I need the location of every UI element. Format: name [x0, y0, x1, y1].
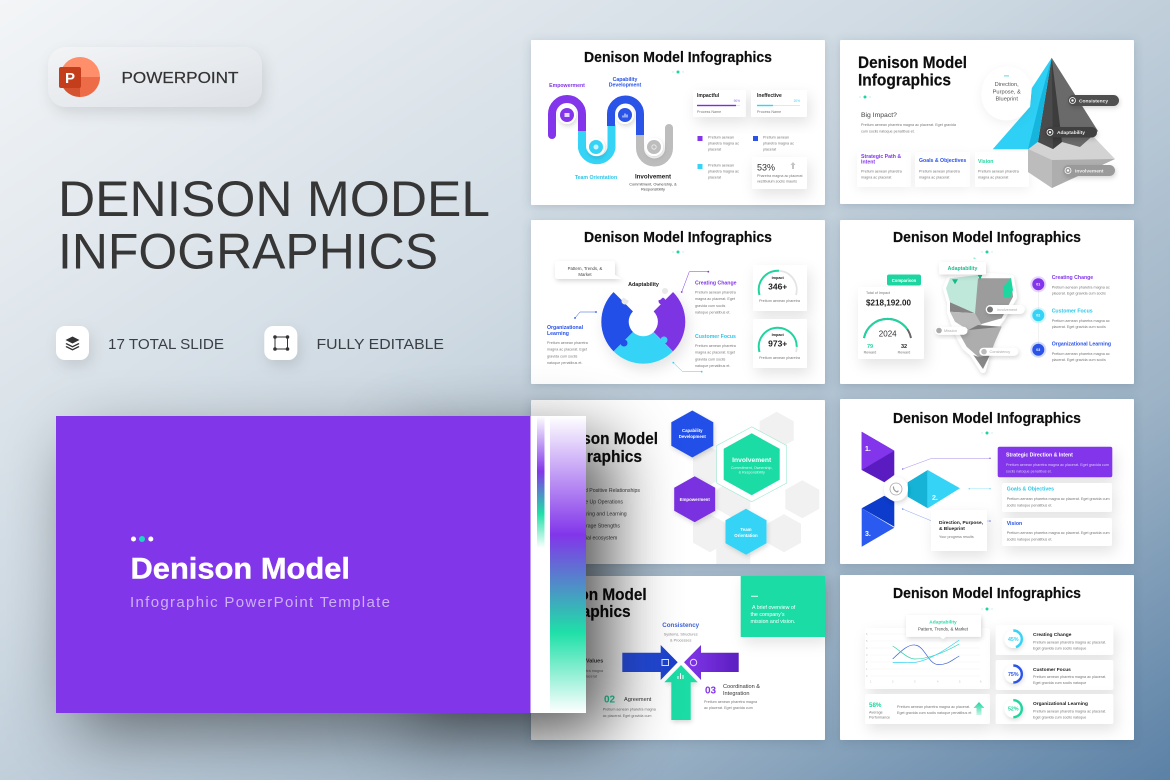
list: 01 [1036, 283, 1040, 287]
slide title: Denison Model Infographics [584, 50, 772, 66]
card: 53%: Pharetra magna ac placerat [757, 174, 803, 178]
card: 58%: Pretium aenean pharetra magna ac placerat. [897, 705, 970, 709]
card: customer focus: Pretium aenean pharetra magna ac placerat. [1033, 675, 1106, 679]
hexagon: involvement: Involvement [732, 457, 772, 464]
labels: Responsibility [641, 187, 665, 192]
card: ineffective [751, 90, 807, 117]
text block: Pretium aenean pharetra magna ac placerat. Eget gravida [861, 123, 957, 127]
gauge card: 973+: Pretium aenean pharetra [759, 356, 801, 360]
hexagon: involvement [717, 427, 787, 502]
line chart: 1 [866, 667, 868, 671]
text: creating change: gravida cum sociis [695, 304, 725, 308]
heading: consistency: & Processes [670, 638, 691, 642]
gauge card: 973+ [753, 319, 807, 368]
list: placerat. Eget gravida cum sociis [1052, 358, 1106, 362]
slide title [858, 54, 967, 90]
line chart: 5 [866, 639, 868, 643]
map label: consistency: Consistency [990, 350, 1010, 354]
arrow: purple [684, 645, 739, 680]
card: direction [931, 510, 987, 551]
text: customer focus: magna ac placerat. Eget [695, 351, 735, 355]
callout: mission and vision. [750, 619, 795, 625]
slide title: Infographics [549, 448, 642, 466]
slide 2: pyramid [840, 40, 1134, 204]
slide title: Infographics [538, 603, 631, 621]
slide title: Denison Model Infographics [893, 411, 1081, 427]
text: customer focus [695, 334, 737, 368]
slide title: Denison Model Infographics [893, 586, 1081, 602]
three cards [857, 152, 1029, 187]
legend items: placerat [708, 148, 721, 152]
hexagon: involvement: Commitment, Ownership, [731, 466, 773, 470]
card: 58% [865, 694, 990, 724]
list: 02 [1036, 314, 1040, 318]
panel shadow [75, 445, 405, 730]
card: comparison: Reward [898, 350, 910, 354]
hexagon: empowerment [674, 476, 715, 522]
card: ineffective: Process Name [757, 110, 781, 114]
card: goals: sociis natoque penatibus et. [1007, 504, 1052, 508]
text: organizational learning: Organizational [547, 325, 584, 331]
labels: Involvement [635, 174, 671, 180]
list: Leverage Strengths [575, 524, 620, 530]
map label: involvement [986, 305, 1025, 314]
line chart: 3 [914, 680, 916, 684]
label: consistency: Consistency [1079, 98, 1108, 104]
card: creating change: Eget gravida cum sociis natoque [1033, 646, 1086, 650]
item 02: Agreement [624, 697, 652, 703]
list: 03 [1036, 348, 1040, 352]
text block: cum sociis natoque penatibus et. [861, 130, 915, 134]
slide 4: polygon map [840, 220, 1134, 384]
three cards: Pretium aenean pharetra [919, 170, 961, 174]
main heading: INFOGRAPHICS [58, 224, 438, 280]
hexagon: team orientation [726, 509, 766, 555]
item 03: Pretium aenean pharetra magna [704, 700, 758, 704]
slide title [538, 586, 647, 621]
labels: Empowerment [549, 83, 585, 89]
pyramid [993, 58, 1115, 188]
card: creating change [996, 625, 1113, 655]
line chart: 4 [866, 646, 868, 650]
text: customer focus: natoque penatibus et. [695, 364, 730, 368]
shape 2: 2. [932, 495, 938, 502]
card: goals: Goals & Objectives [1007, 487, 1054, 493]
pagination dots [672, 250, 684, 254]
gradient strip [530, 416, 586, 713]
text: organizational learning: gravida cum sociis [547, 354, 577, 358]
gauge card: 346+ [753, 265, 807, 311]
legend items: pharetra magna ac [708, 142, 739, 146]
item 02 [603, 694, 657, 718]
pagination dots [859, 96, 871, 98]
panel: purple cover [56, 416, 530, 713]
card: impactful: Process Name [697, 110, 721, 114]
card: vision: Vision [1007, 521, 1022, 527]
list: Sharing and Learning [577, 511, 627, 517]
hexagon: capability development: Capability [682, 428, 703, 433]
list: Creating Change [1052, 275, 1093, 281]
slide 7: converging arrows [531, 576, 825, 740]
slide 1: snake path [531, 40, 825, 205]
three cards: magna ac placerat [919, 176, 949, 180]
list: placerat. Eget gravida cum sociis [1052, 291, 1106, 295]
label: adaptability: Adaptability [1057, 130, 1085, 136]
slide 6: three arrows [840, 399, 1134, 564]
bubble: pattern: Market [578, 272, 592, 277]
card: ineffective: Ineffective [757, 93, 782, 99]
three cards: magna ac placerat [861, 176, 891, 180]
hexagon: involvement: & Responsibility [739, 470, 765, 474]
shape 1 [862, 432, 894, 482]
pagination dots [981, 250, 993, 254]
map label: consistency [979, 348, 1018, 356]
card: 53%: 53% [757, 162, 775, 172]
card: comparison: 2024 [879, 330, 897, 338]
gauge card: 346+: 346+ [768, 282, 787, 292]
card: customer focus: 75% [1008, 672, 1019, 678]
card: organizational learning: Pretium aenean pharetra magna ac placerat. [1033, 710, 1106, 714]
card: 58%: Performance [869, 716, 890, 720]
three cards: Vision [978, 159, 993, 165]
list: Social ecosystem [577, 536, 617, 542]
pagination dots [981, 608, 993, 610]
three cards: Pretium aenean pharetra [978, 170, 1020, 174]
shape 3: 3. [865, 531, 871, 538]
slide title [549, 430, 658, 466]
connectors [902, 458, 991, 522]
card: 58%: Eget gravida cum sociis natoque penatibus et [897, 711, 971, 715]
card: vision [1002, 518, 1112, 546]
cover dots [131, 536, 153, 542]
text: organizational learning [547, 325, 589, 365]
label: consistency [1068, 95, 1119, 106]
card: comparison: Comparison [892, 278, 917, 283]
legend items: pharetra magna ac [763, 142, 794, 146]
text: customer focus: Customer Focus [695, 334, 736, 340]
card: comparison: 79 [867, 344, 873, 350]
icon: vector square [274, 336, 289, 350]
card: strategic direction [998, 447, 1112, 477]
list [1030, 275, 1111, 362]
card: customer focus [996, 660, 1113, 690]
shape 1: 1. [865, 446, 871, 453]
labels: Capability [613, 77, 638, 83]
shape 3 [862, 496, 894, 547]
label: involvement: Involvement [1075, 168, 1104, 174]
hexagon: capability development: Development [679, 434, 706, 439]
main heading: DENISON MODEL [58, 171, 490, 227]
three cards: magna ac placerat [978, 176, 1008, 180]
card: creating change: Creating Change [1033, 632, 1072, 638]
card: ineffective: 20% [794, 99, 800, 103]
card: organizational learning: Eget gravida cum sociis natoque [1033, 716, 1086, 720]
text block [861, 112, 957, 134]
hexagon: team orientation: Team [740, 527, 752, 532]
icon: PowerPoint logo [59, 57, 100, 97]
bubble: direction: Blueprint [995, 97, 1018, 103]
slide title: Denison Model Infographics [893, 230, 1081, 246]
list: Organizational Learning [1052, 342, 1111, 348]
cover subtitle: Infographic PowerPoint Template [130, 594, 390, 611]
three cards: Intent [861, 160, 875, 166]
card: comparison [858, 274, 924, 359]
line chart [865, 628, 990, 689]
snake chart [552, 99, 669, 162]
map label: involvement: Involvement [997, 308, 1018, 312]
line chart: 6 [866, 632, 868, 636]
bubble: pattern: Pattern, Trends, & [568, 266, 602, 271]
feature: fully editable [264, 326, 444, 360]
item 02: ac placerat. Eget gravida cum [603, 714, 651, 718]
card: comparison: 32 [901, 344, 907, 350]
list: Pretium aenean pharetra magna ac [1052, 319, 1110, 323]
gauge card: 346+: Impact [772, 276, 785, 280]
feature: fully editable: FULLY EDITABLE [316, 336, 444, 353]
connectors [574, 271, 709, 373]
card: 53% [752, 157, 807, 189]
callout [741, 576, 825, 637]
card: direction: Your progress results [939, 535, 974, 539]
card: impactful: Impactful [697, 93, 720, 99]
legend items: placerat [763, 148, 776, 152]
labels: Team Orientation [575, 175, 617, 181]
chart popup: Pattern, Trends, & Market [918, 626, 969, 632]
list [575, 488, 640, 542]
card: 53%: vestibulum sociis mauris [757, 180, 797, 184]
slide title: Infographics [858, 72, 951, 90]
slide title: Denison Model [858, 54, 967, 72]
bubble: direction: Purpose, & [993, 89, 1021, 95]
polygon map [946, 275, 1014, 370]
puzzle donut chart [601, 266, 685, 364]
item 03: Integration [723, 691, 749, 697]
line chart: 0 [866, 674, 868, 678]
slide title: Denison Model Infographics [584, 230, 772, 246]
icon: PowerPoint logo: P [65, 70, 75, 87]
line chart: 1 [870, 680, 872, 684]
list: Customer Focus [1052, 308, 1093, 314]
card: 58%: 58% [869, 702, 882, 709]
map label: mission [935, 327, 968, 335]
card: comparison: Total of Impact [866, 291, 890, 295]
labels [549, 77, 677, 192]
card: customer focus: Customer Focus [1033, 667, 1071, 673]
item 03 [704, 684, 760, 710]
text: creating change: Creating Change [695, 280, 737, 286]
labels: Development [609, 82, 642, 88]
line chart: 5 [959, 680, 961, 684]
hexagon: team orientation: Orientation [734, 533, 758, 538]
legend items: Pretium aenean [708, 164, 734, 168]
text: organizational learning: Learning [547, 331, 569, 337]
line chart: 2 [892, 680, 894, 684]
line chart: 4 [937, 680, 939, 684]
callout: the company's [750, 612, 785, 618]
text: creating change: natoque penatibus et. [695, 311, 730, 315]
labels: Commitment, Ownership, & [629, 182, 677, 186]
text: customer focus: gravida cum sociis [695, 357, 725, 361]
card: strategic direction: Strategic Direction & Intent [1006, 453, 1073, 459]
slide title: Denison Model [538, 586, 647, 604]
item 01: ac placerat [579, 674, 597, 678]
bubble: pattern [555, 261, 622, 279]
three cards: Pretium aenean pharetra [861, 170, 903, 174]
text: customer focus: Pretium aenean pharetra [695, 344, 737, 348]
arrow: blue [622, 645, 678, 680]
heading: consistency [662, 622, 700, 642]
item 02: 02 [604, 694, 616, 706]
card: direction: & Blueprint [939, 526, 965, 532]
heading: consistency: Consistency [662, 622, 700, 629]
item 01: Pretium aenean pharetra magna [550, 669, 604, 673]
slide 3: puzzle donut [531, 220, 825, 384]
card: creating change: 45% [1008, 637, 1019, 643]
card: creating change: Pretium aenean pharetra magna ac placerat. [1033, 640, 1106, 644]
item 03: ac placerat. Eget gravida cum [704, 706, 753, 710]
list: Pretium aenean pharetra magna ac [1052, 352, 1110, 356]
text: creating change: magna ac placerat. Eget [695, 297, 735, 301]
card: comparison: $218,192.00 [866, 299, 912, 308]
text: organizational learning: natoque penatibus et. [547, 361, 582, 365]
hexagon: empowerment: Empowerment [680, 497, 710, 502]
chart popup [906, 615, 981, 639]
card: 58%: Average [869, 710, 883, 714]
line chart: 6 [980, 680, 982, 684]
card: vision: Pretium aenean pharetra magna ac placerat. Eget gravida cum [1007, 531, 1110, 535]
line chart: 2 [866, 660, 868, 664]
text: organizational learning: Pretium aenean pharetra [547, 341, 589, 345]
legend items: pharetra magna ac [708, 170, 739, 174]
hexagon: capability development [671, 410, 713, 458]
item 01: 01 Values [578, 658, 603, 664]
callout: A brief overview of [752, 605, 796, 611]
gauge card: 973+: 973+ [768, 338, 787, 348]
card: vision: sociis natoque penatibus et. [1007, 537, 1052, 541]
legend items: Pretium aenean [708, 136, 734, 140]
gauge card: 973+: Impact [772, 333, 785, 337]
card: customer focus: Eget gravida cum sociis natoque [1033, 681, 1086, 685]
card: organizational learning: 52% [1008, 707, 1019, 713]
feature: 17 total slide: 17 TOTAL SLIDE [108, 336, 224, 353]
badge: PowerPoint: POWERPOINT [122, 70, 239, 87]
legend items: placerat [708, 176, 721, 180]
center icon [884, 477, 908, 501]
line chart: 3 [866, 653, 868, 657]
text: organizational learning: magna ac placerat. Eget [547, 348, 587, 352]
feature: 17 total slide [56, 326, 224, 360]
slide 8: line chart [840, 575, 1134, 740]
card: organizational learning [996, 694, 1113, 724]
arrow: teal [664, 665, 698, 720]
strip shadow [400, 440, 610, 735]
list: Scale Up Operations [575, 500, 623, 506]
three cards: Strategic Path & [861, 154, 901, 160]
item 01 [550, 658, 604, 678]
list: Build Positive Relationships [576, 488, 640, 494]
card: comparison: Reward [864, 350, 876, 354]
item 03: Coordination & [723, 684, 760, 690]
map label: adaptability: Adaptability [948, 266, 977, 272]
card: direction: Direction, Purpose, [939, 520, 984, 526]
map label: mission: Mission [944, 329, 957, 333]
card: organizational learning: Organizational Learning [1033, 701, 1088, 707]
bubble: direction [981, 67, 1032, 120]
shape 2 [908, 470, 960, 508]
chart popup: Adaptability [929, 620, 957, 626]
card: goals: Pretium aenean pharetra magna ac placerat. Eget gravida cum [1007, 497, 1110, 501]
bubble: direction: Direction, [995, 82, 1019, 88]
text: creating change: Pretium aenean pharetra [695, 290, 737, 294]
text block: Big Impact? [861, 112, 897, 119]
slide 5: hexagons [531, 400, 825, 577]
heading: consistency: Systems, Structures [664, 633, 698, 637]
card: strategic direction: Pretium aenean pharetra magna ac placerat. Eget gravida cum [1006, 463, 1109, 467]
card: impactful [693, 90, 746, 117]
gauge card: 346+: Pretium aenean pharetra [759, 299, 801, 303]
pagination dots [981, 432, 993, 434]
badge: PowerPoint [48, 47, 262, 107]
legend items: Pretium aenean [763, 136, 789, 140]
three cards: Goals & Objectives [919, 158, 966, 164]
pagination dots [672, 70, 684, 74]
background hexagons [693, 412, 819, 577]
list: placerat. Eget gravida cum sociis [1052, 325, 1106, 329]
slide title: Denison Model [549, 430, 658, 448]
label: adaptability [1045, 127, 1097, 138]
icon: layers [66, 336, 80, 350]
card: strategic direction: sociis natoque penatibus et. [1006, 469, 1052, 473]
donut label: Adaptability [628, 282, 659, 288]
card: impactful: 90% [734, 99, 740, 103]
map label: adaptability [939, 258, 986, 274]
label: involvement [1063, 165, 1115, 176]
item 03: 03 [705, 686, 717, 696]
main heading [58, 171, 490, 280]
item 02: Pretium aenean pharetra magna [603, 708, 657, 712]
card: goals [1002, 483, 1112, 512]
list: Pretium aenean pharetra magna ac [1052, 285, 1110, 289]
cover title: Denison Model [130, 552, 350, 585]
legend items [698, 136, 794, 180]
text: creating change [695, 280, 737, 315]
